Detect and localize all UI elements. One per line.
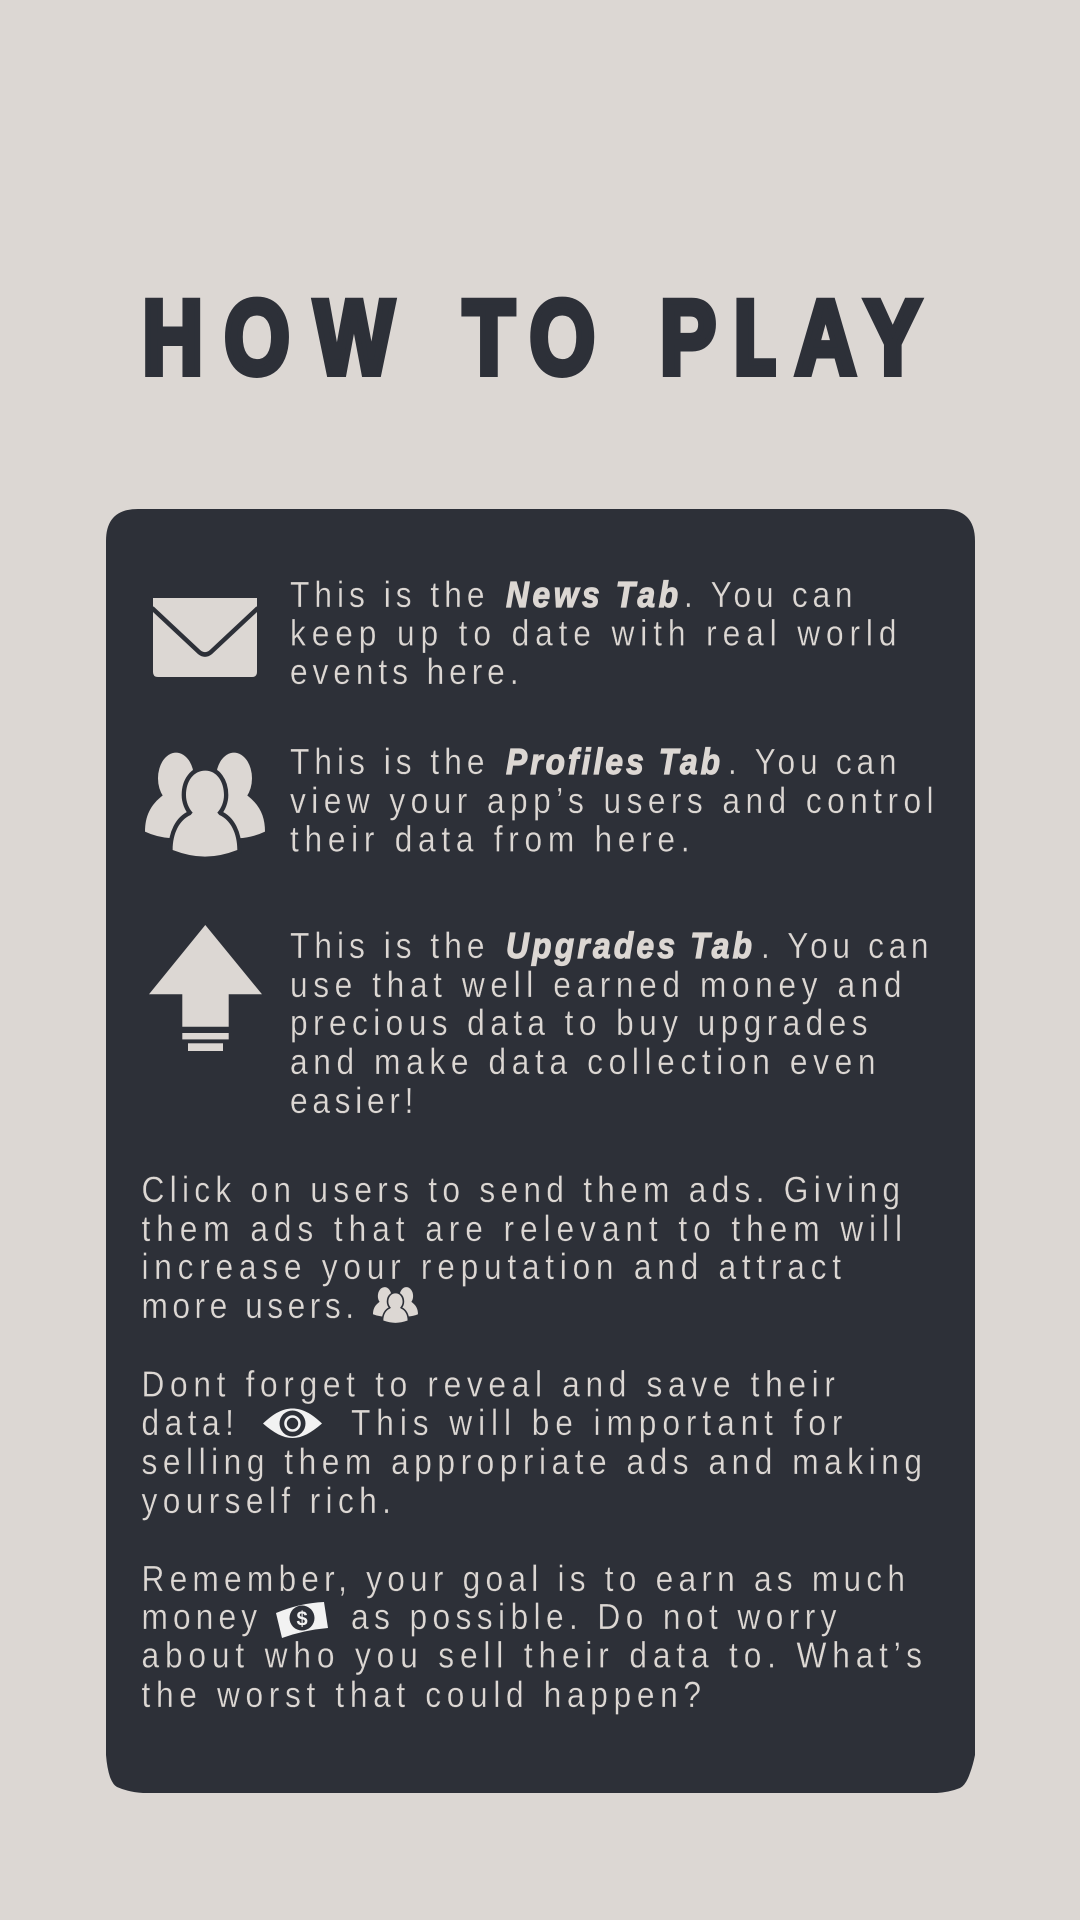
title: HOW TO PLAY [142,280,921,397]
icon: small users group [373,1287,418,1323]
text: news tab: This is the [290,575,484,615]
text: upgrades tab: easier! [290,1081,413,1121]
text: news tab: News Tab [506,575,678,615]
text: earn money [142,1559,922,1715]
text: upgrades tab [290,926,928,1121]
text: earn money: Remember, your goal is to earn as much [142,1559,905,1599]
text: profiles tab: their data from here. [290,820,690,860]
icon: upgrades arrow [149,925,262,1051]
text: profiles tab: This is the [290,742,484,782]
text: click on users: Click on users to send them ads. Giving [142,1170,900,1210]
text: click on users: them ads that are relevant to them will [142,1209,902,1249]
icon: money banknote [276,1602,328,1638]
text: profiles tab: view your app’s users and control [290,781,934,821]
text: earn money: as possible. Do not worry [351,1597,837,1637]
text: upgrades tab: This is the [290,926,484,966]
text: reveal and save data: Dont forget to reveal and save their [142,1365,835,1405]
text: upgrades tab: . You can [761,926,928,966]
text: reveal and save data: data! [142,1403,234,1443]
text: reveal and save data: yourself rich. [142,1481,391,1521]
text: click on users: more users. [142,1286,354,1326]
text: click on users: increase your reputation and attract [142,1247,842,1287]
text: reveal and save data: This will be important for [351,1403,842,1443]
text: news tab [290,575,896,692]
text: news tab: events here. [290,652,519,692]
text: earn money: the worst that could happen? [142,1675,701,1715]
icon: profiles group [145,753,265,857]
panel: instructions [106,509,975,1793]
icon: eye [263,1408,322,1438]
text: earn money: about who you sell their data to. What’s [142,1636,922,1676]
text: upgrades tab: and make data collection even [290,1042,875,1082]
text: upgrades tab: Upgrades Tab [506,926,752,966]
text: reveal and save data [142,1365,922,1521]
text: reveal and save data: selling them appropriate ads and making [142,1442,922,1482]
text: news tab: keep up to date with real world [290,614,896,654]
text: profiles tab [290,742,934,860]
text: earn money: money [142,1597,257,1637]
icon: money banknote: $ [296,1608,308,1630]
text: profiles tab: . You can [728,742,897,782]
text: news tab: . You can [684,575,853,615]
text: upgrades tab: use that well earned money and [290,965,902,1005]
text: upgrades tab: precious data to buy upgrades [290,1003,868,1043]
text: click on users [142,1170,902,1326]
icon: news envelope [152,598,258,677]
text: profiles tab: Profiles Tab [506,742,720,782]
